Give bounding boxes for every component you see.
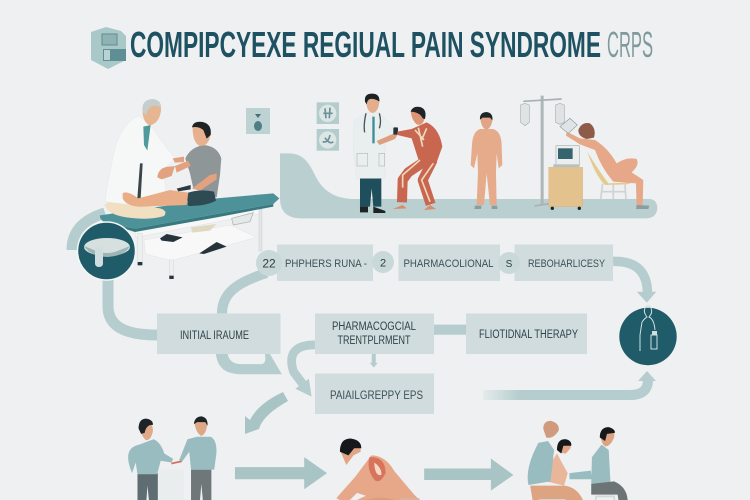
rehab group — [528, 421, 628, 500]
IV pole — [521, 96, 564, 206]
title icon: clinic building — [91, 27, 126, 69]
box: physical therapy: FLIOTIDNAL THERAPY — [479, 329, 578, 341]
reclining patient on chair — [560, 118, 649, 209]
right man — [171, 416, 216, 500]
bottom figures: two men — [128, 416, 628, 500]
step box 2 — [398, 244, 500, 281]
step box 3: REBOHARLICESY — [528, 258, 606, 270]
left man — [128, 419, 173, 500]
step badge S: S — [506, 259, 513, 270]
arrow: initial trauma loop — [216, 354, 282, 374]
framed diagrams — [317, 102, 339, 151]
box: pain therapy — [315, 374, 434, 414]
box: pharmacological treatment: TRENTPLRMENT — [338, 335, 410, 347]
examination scene — [100, 99, 279, 279]
treatment table — [100, 193, 279, 279]
arrow: to back pain — [235, 457, 327, 489]
back pain patient — [336, 439, 420, 500]
step box 2: PHARMACOLIONAL — [404, 258, 494, 270]
floor band — [280, 153, 657, 218]
box: initial trauma — [157, 314, 280, 354]
step badge 2 — [372, 251, 394, 273]
scene: clinical figures on band — [280, 94, 657, 218]
box: pharmacological treatment: PHARMACOGCIAL — [332, 321, 416, 333]
step box 3 — [514, 244, 613, 281]
box: pain therapy: PAIAILGREPPY EPS — [330, 390, 423, 402]
step badge 2: 2 — [380, 258, 386, 270]
patient — [123, 122, 221, 207]
flow connectors — [216, 261, 656, 397]
arrow: step 22 curve down to initial trauma — [222, 273, 267, 313]
arrow: pain box to lower left — [245, 392, 288, 434]
icon: circular disk badge — [78, 222, 136, 280]
text: CRPS — [607, 24, 653, 65]
step box 1 — [277, 244, 373, 281]
step box 1: PHPHERS RUNA - — [285, 258, 367, 270]
icon: patient with device circle — [619, 306, 677, 365]
arrow: pharmacological down — [370, 354, 378, 367]
box: physical therapy — [466, 314, 587, 354]
arrow: to rehabilitation — [424, 459, 513, 491]
pillow — [105, 201, 165, 219]
box: pharmacological treatment — [315, 314, 434, 354]
arrow: return to patient icon — [483, 371, 656, 395]
arrow: rehabilitation to patient icon — [613, 261, 656, 303]
step badge S — [498, 252, 520, 274]
doctor with stethoscope — [353, 94, 398, 213]
patient: muscular anatomy — [393, 107, 442, 210]
table between — [159, 470, 184, 500]
step badge 22 — [256, 250, 282, 276]
monitor on cabinet — [549, 146, 583, 210]
doctor — [105, 99, 184, 205]
connector: pharmacological to physical therapy — [434, 315, 466, 345]
standing figure — [471, 112, 502, 209]
arrow: pharmacological curve to pain box — [292, 345, 315, 397]
small framed icon: bottle — [246, 108, 270, 134]
connector: band from table to initial trauma — [72, 213, 157, 335]
box: initial trauma: INITIAL IRAUME — [180, 330, 249, 342]
step badge 22: 22 — [262, 256, 276, 270]
